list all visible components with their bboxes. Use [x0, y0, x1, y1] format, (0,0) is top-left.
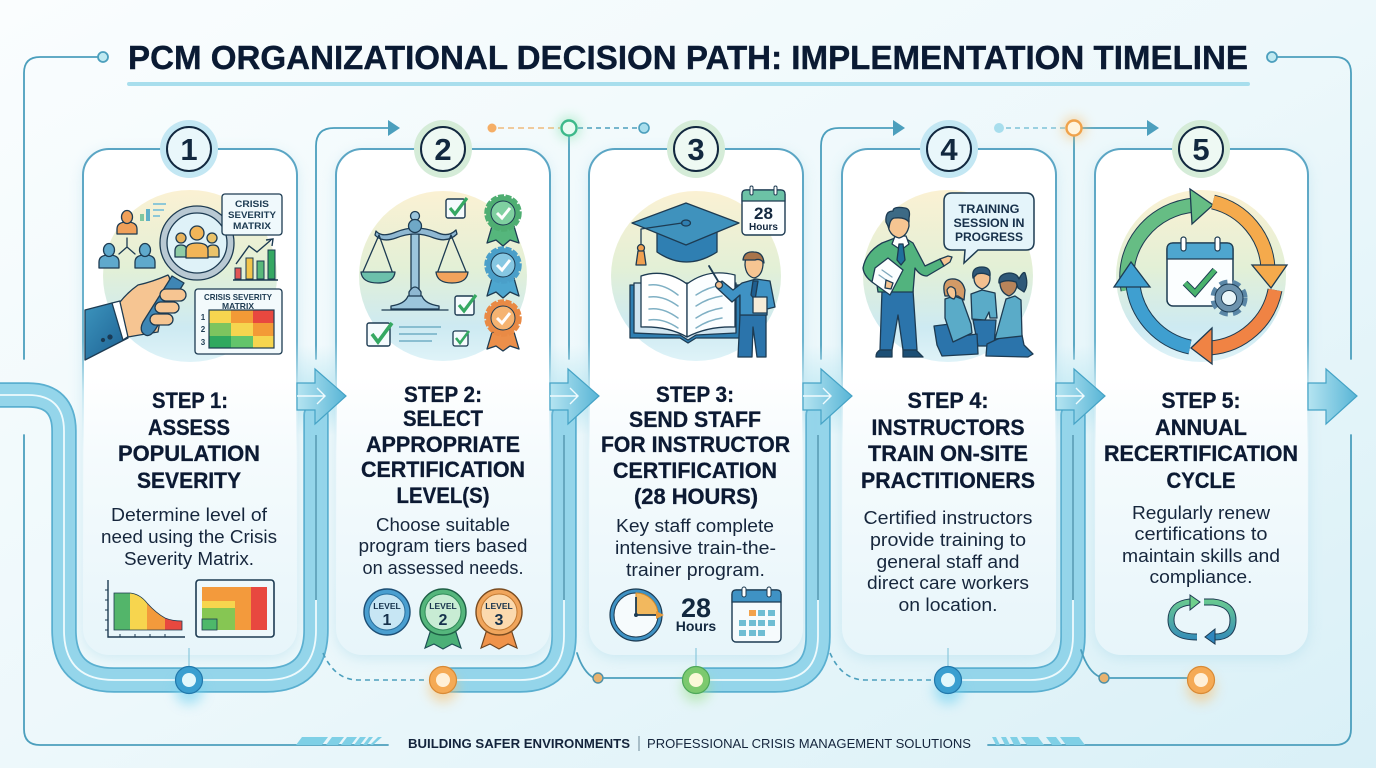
level medals: 3: [495, 612, 504, 629]
description: compliance.: [1150, 567, 1252, 587]
heading: [861, 388, 1035, 493]
callout: training session: [944, 193, 1034, 263]
footer text: [408, 736, 971, 751]
heading: STEP 5:: [1162, 388, 1240, 413]
badge 3: 3: [687, 132, 705, 167]
icon: open book: [630, 273, 740, 343]
icon: gear: [1215, 284, 1243, 312]
pale bands behind flow arrows: [297, 345, 1096, 435]
icon: checkboxes: [367, 198, 476, 346]
description: Choose suitable: [376, 515, 510, 535]
heading: STEP 3:: [656, 382, 734, 407]
icon: mini bar marks: [140, 204, 166, 221]
badge 4: 4: [940, 132, 958, 167]
icon: seated trainees: [934, 267, 1033, 357]
description: provide training to: [870, 530, 1026, 550]
description: trainer program.: [626, 560, 765, 580]
top connectors between steps: [316, 117, 1159, 359]
panel: step 1: [83, 120, 297, 655]
level medals: [364, 589, 522, 649]
description: general staff and: [876, 552, 1020, 572]
description: [615, 516, 776, 580]
description: Key staff complete: [616, 516, 774, 536]
panel: severity matrix table: [195, 289, 282, 354]
panel: severity matrix table: 3: [201, 338, 206, 347]
heading: [601, 382, 790, 509]
callout: training session: TRAINING: [958, 202, 1020, 216]
panel: severity matrix table: 2: [201, 325, 206, 334]
text: 28 hours: 28: [681, 593, 711, 623]
description: [864, 508, 1032, 615]
level medals: LEVEL: [429, 601, 457, 611]
left trainee: [934, 279, 978, 356]
bottom connectors: [323, 650, 1188, 683]
icon: people network: [99, 210, 155, 268]
heading: TRAIN ON-SITE: [868, 441, 1028, 466]
flow pipe segments: [0, 395, 1073, 680]
illustration backdrop: [863, 190, 1033, 362]
description: program tiers based: [358, 536, 528, 556]
footer text: PROFESSIONAL CRISIS MANAGEMENT SOLUTIONS: [647, 736, 971, 751]
badge 5: 5: [1192, 132, 1210, 167]
icon: calendar grid: [732, 587, 781, 642]
callout: training session: SESSION IN: [954, 216, 1024, 230]
text: 28 hours: Hours: [676, 618, 716, 634]
level medals: 1: [383, 612, 392, 629]
callout: training session: PROGRESS: [955, 230, 1023, 244]
label: crisis severity matrix: [222, 194, 282, 235]
card shadows: [83, 152, 1308, 658]
heading: SEND STAFF: [629, 407, 761, 432]
heading: STEP 2:: [404, 382, 482, 407]
icon: 28 hours calendar: Hours: [749, 222, 778, 233]
flow arrows: [297, 369, 1357, 424]
label: crisis severity matrix: CRISIS: [235, 199, 269, 210]
illustration backdrop: [103, 190, 277, 362]
heading: [118, 388, 260, 493]
title: PCM ORGANIZATIONAL DECISION PATH: IMPLEMENTATION TIMELINE: [128, 39, 1248, 76]
description: on location.: [898, 595, 998, 615]
heading: ANNUAL: [1155, 415, 1247, 440]
icon: balance scale: [361, 212, 468, 310]
footer text: BUILDING SAFER ENVIRONMENTS: [408, 736, 630, 751]
icon: calendar with check: [1167, 237, 1233, 306]
text: 28 hours: [676, 593, 716, 634]
description: Determine level of: [111, 505, 268, 525]
level medals: 2: [439, 612, 448, 629]
description: [1122, 503, 1280, 587]
badge 1: [160, 120, 218, 178]
label: crisis severity matrix: SEVERITY: [228, 210, 277, 221]
icon: teacher: [709, 252, 775, 357]
description: [358, 515, 528, 578]
illustration backdrop: [359, 191, 527, 361]
heading: LEVEL(S): [396, 483, 490, 508]
icon: renewal cycle arrows: [1114, 189, 1287, 364]
timeline nodes: [175, 648, 1215, 704]
description: direct care workers: [867, 573, 1029, 593]
description: [101, 505, 277, 569]
panel: step 3: [589, 120, 803, 655]
badge 2: 2: [434, 132, 452, 167]
heading: (28 HOURS): [634, 484, 758, 509]
badge 5: [1172, 120, 1230, 178]
heading: SEVERITY: [137, 468, 241, 493]
description: maintain skills and: [1122, 546, 1280, 566]
description: on assessed needs.: [362, 558, 524, 578]
panel: step 5: [1095, 120, 1308, 655]
heading: SELECT: [403, 406, 484, 431]
icon: magnifying glass: [160, 206, 234, 280]
footer decorative stripes: [296, 737, 1085, 745]
level medals: LEVEL: [485, 601, 513, 611]
heading: RECERTIFICATION: [1104, 441, 1298, 466]
description: certifications to: [1134, 524, 1268, 544]
label: crisis severity matrix: MATRIX: [233, 221, 272, 232]
title underline: [127, 82, 1250, 86]
panel: step 4: [842, 120, 1056, 655]
icon: small renewal arrows: [1171, 595, 1233, 644]
heading: CERTIFICATION: [361, 457, 525, 482]
chart: severity curve: [105, 580, 185, 637]
heading: STEP 4:: [908, 388, 988, 413]
panel: severity matrix table: CRISIS SEVERITY: [204, 292, 272, 302]
panel: severity matrix table: MATRIX: [222, 301, 254, 311]
description: Severity Matrix.: [124, 549, 254, 569]
badge 1: 1: [180, 132, 198, 167]
badge 3: [667, 120, 725, 178]
heading: PRACTITIONERS: [861, 468, 1035, 493]
badge 4: [920, 120, 978, 178]
description: Certified instructors: [864, 508, 1032, 528]
heading: ASSESS: [148, 415, 230, 440]
heading: CERTIFICATION: [613, 458, 777, 483]
illustration backdrop: [1116, 190, 1286, 362]
panel: step 2: [336, 120, 550, 655]
heading: POPULATION: [118, 441, 260, 466]
right trainee: [986, 273, 1033, 357]
illustration backdrop: [611, 191, 781, 361]
heading: INSTRUCTORS: [872, 415, 1024, 440]
badge 2: [414, 120, 472, 178]
heading: CYCLE: [1166, 468, 1236, 493]
description: intensive train-the-: [615, 538, 776, 558]
heading: [361, 382, 525, 508]
heading: APPROPRIATE: [366, 432, 520, 457]
icon: 28 hours calendar: 28: [754, 204, 773, 223]
level medals: LEVEL: [373, 601, 401, 611]
chart: rising bars: [233, 239, 278, 280]
icon: clock: [610, 589, 664, 641]
icon: graduation cap: [632, 203, 739, 265]
panel: severity matrix table: 1: [201, 313, 206, 322]
chart: severity heat block: [196, 580, 274, 637]
icon: rosettes: [486, 196, 520, 351]
heading: [1104, 388, 1298, 493]
heading: FOR INSTRUCTOR: [601, 432, 790, 457]
heading: STEP 1:: [152, 388, 228, 413]
icon: hand and sleeve: [85, 275, 186, 360]
middle trainee: [971, 267, 997, 346]
description: need using the Crisis: [101, 527, 277, 547]
icon: instructor: [863, 207, 952, 357]
description: Regularly renew: [1132, 503, 1271, 523]
icon: 28 hours calendar: [742, 186, 785, 235]
